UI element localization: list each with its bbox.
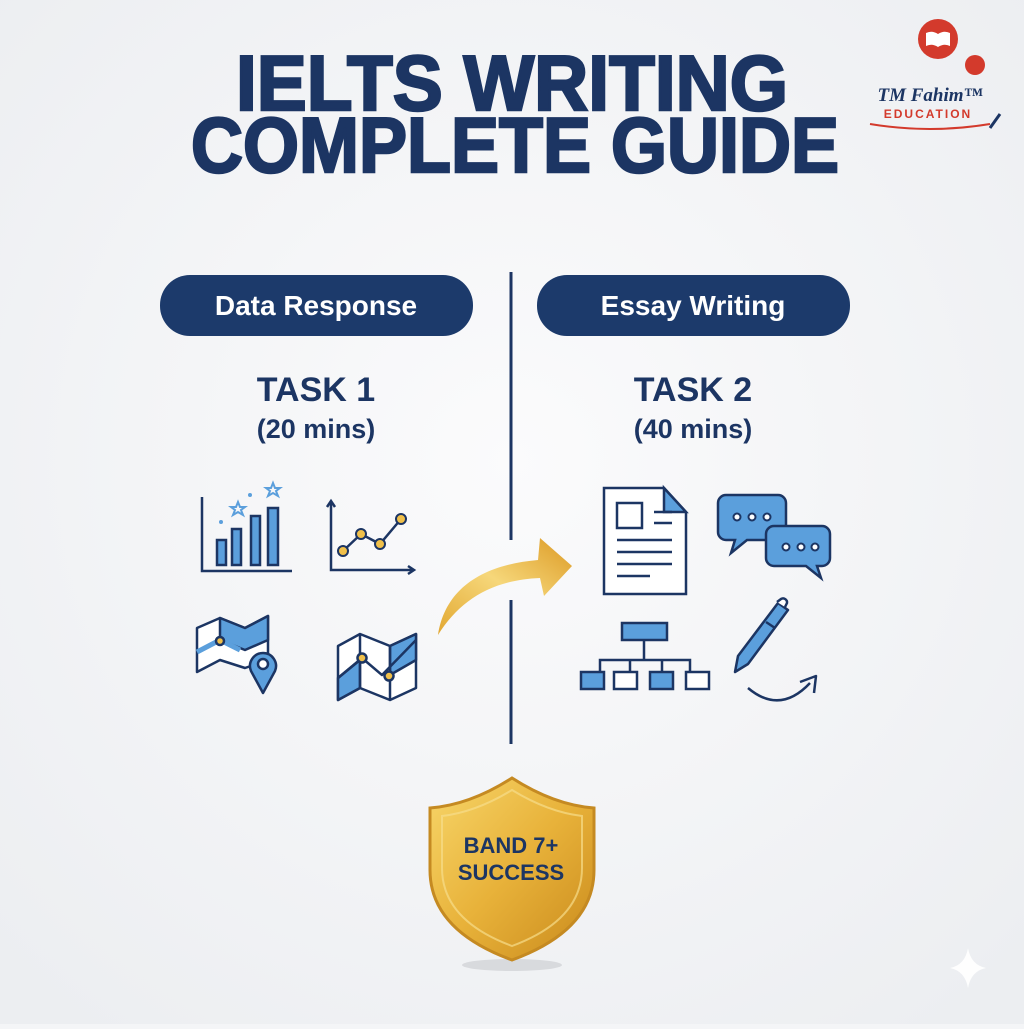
task 1 label [257,371,375,444]
icon: org chart [581,623,709,689]
icon: document [604,488,686,594]
icon: line chart [327,501,414,574]
pill: Data Response [160,275,473,336]
task 1 label: (20 mins) [257,414,375,444]
task 2 label [634,371,752,444]
task 2 label: TASK 2 [634,371,752,409]
title [191,39,839,189]
icon: bar chart [202,483,292,571]
pill: Essay Writing [537,275,850,336]
logo: TM Fahim™ [877,85,983,106]
divider [510,272,512,744]
pill: Data Response: Data Response [215,290,417,321]
logo: EDUCATION [884,107,972,121]
pill: Essay Writing: Essay Writing [601,290,785,321]
title: IELTS WRITING [236,39,788,127]
icon: chat bubbles [718,495,830,578]
arrow: gold curved [438,538,572,635]
task 1 label: TASK 1 [257,371,375,409]
logo [870,19,1000,129]
shield: Band 7+ success: SUCCESS [458,860,564,885]
task 2 label: (40 mins) [634,414,752,444]
icon: map with pin [197,616,276,693]
icon: pen with arrow [735,598,816,700]
icon: folded map [338,634,416,700]
shield: Band 7+ success: BAND 7+ [464,833,558,858]
shield: Band 7+ success [430,778,594,971]
sparkle [950,948,986,988]
title: COMPLETE GUIDE [191,101,839,189]
